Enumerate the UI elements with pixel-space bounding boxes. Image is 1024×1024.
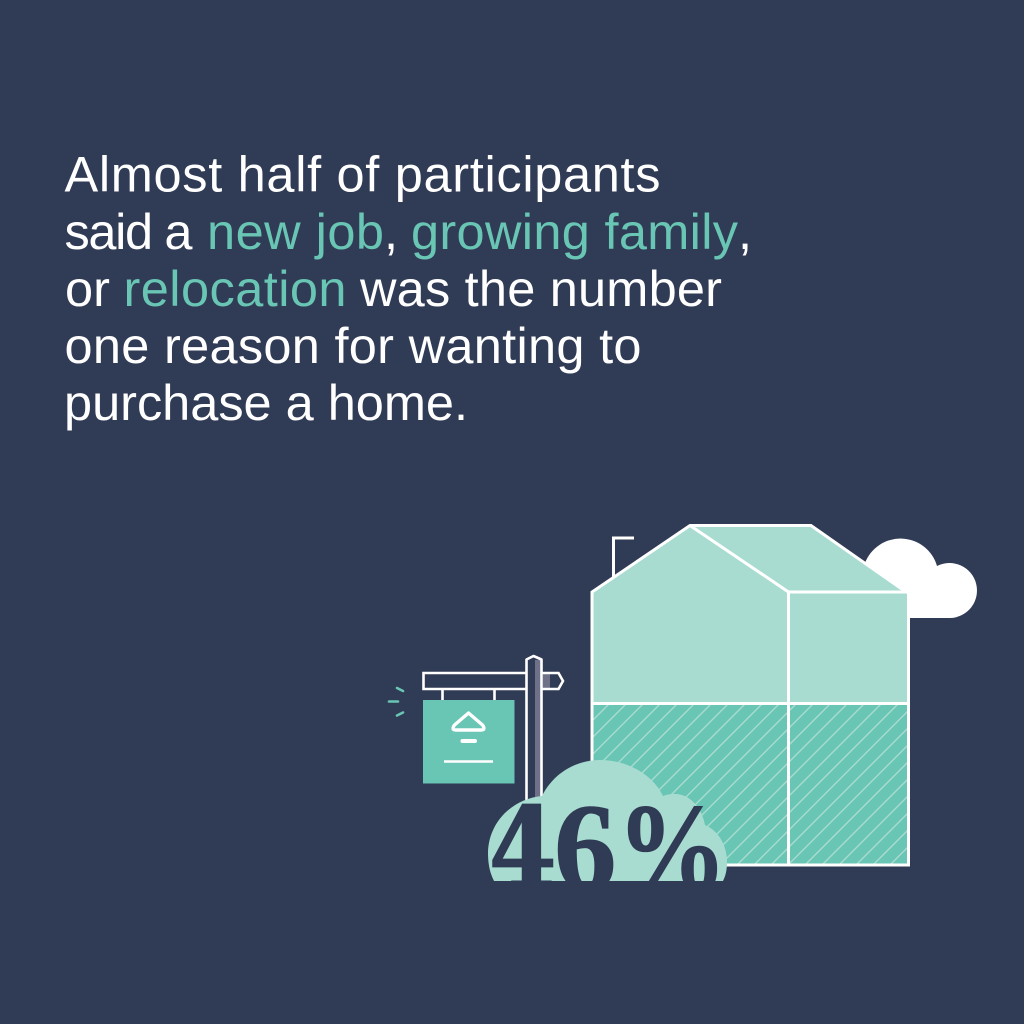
infographic canvas [64, 155, 977, 881]
headline text [64, 146, 752, 431]
sign dash [462, 739, 475, 743]
headline text: , [738, 203, 752, 260]
house lower hatched section [592, 703, 908, 865]
sign beam arrow end [542, 673, 563, 689]
headline text: said a [64, 203, 193, 260]
sign hangers [442, 689, 494, 701]
headline text: was the number [359, 260, 722, 317]
house illustration [592, 526, 908, 865]
house outlines [592, 526, 908, 865]
light cloud behind the percentage [488, 760, 727, 881]
sign line [444, 760, 493, 763]
stat: 46%: 4 [489, 783, 556, 915]
icon: house roof on sign [453, 713, 484, 730]
stat: 46% [492, 804, 718, 881]
sign beam [424, 673, 527, 689]
icon: white cloud behind house [865, 539, 977, 618]
house upper walls and roof [592, 526, 908, 703]
headline text: purchase a home. [64, 374, 468, 431]
headline text: new job [207, 203, 384, 260]
sign board [423, 700, 514, 784]
for sale sign [389, 656, 563, 800]
headline text: relocation [124, 260, 346, 317]
headline text: , [384, 203, 398, 260]
headline text: growing family [411, 203, 739, 260]
stat: 46%: % [617, 780, 727, 918]
stat: 46%: 6 [554, 780, 616, 918]
icon: sparkle ticks [389, 688, 403, 716]
headline text: or [65, 260, 110, 317]
headline text: Almost half of participants [64, 146, 660, 202]
headline text: one reason for wanting to [64, 317, 642, 374]
sign post [526, 656, 542, 800]
icon: chimney outline [614, 538, 634, 577]
